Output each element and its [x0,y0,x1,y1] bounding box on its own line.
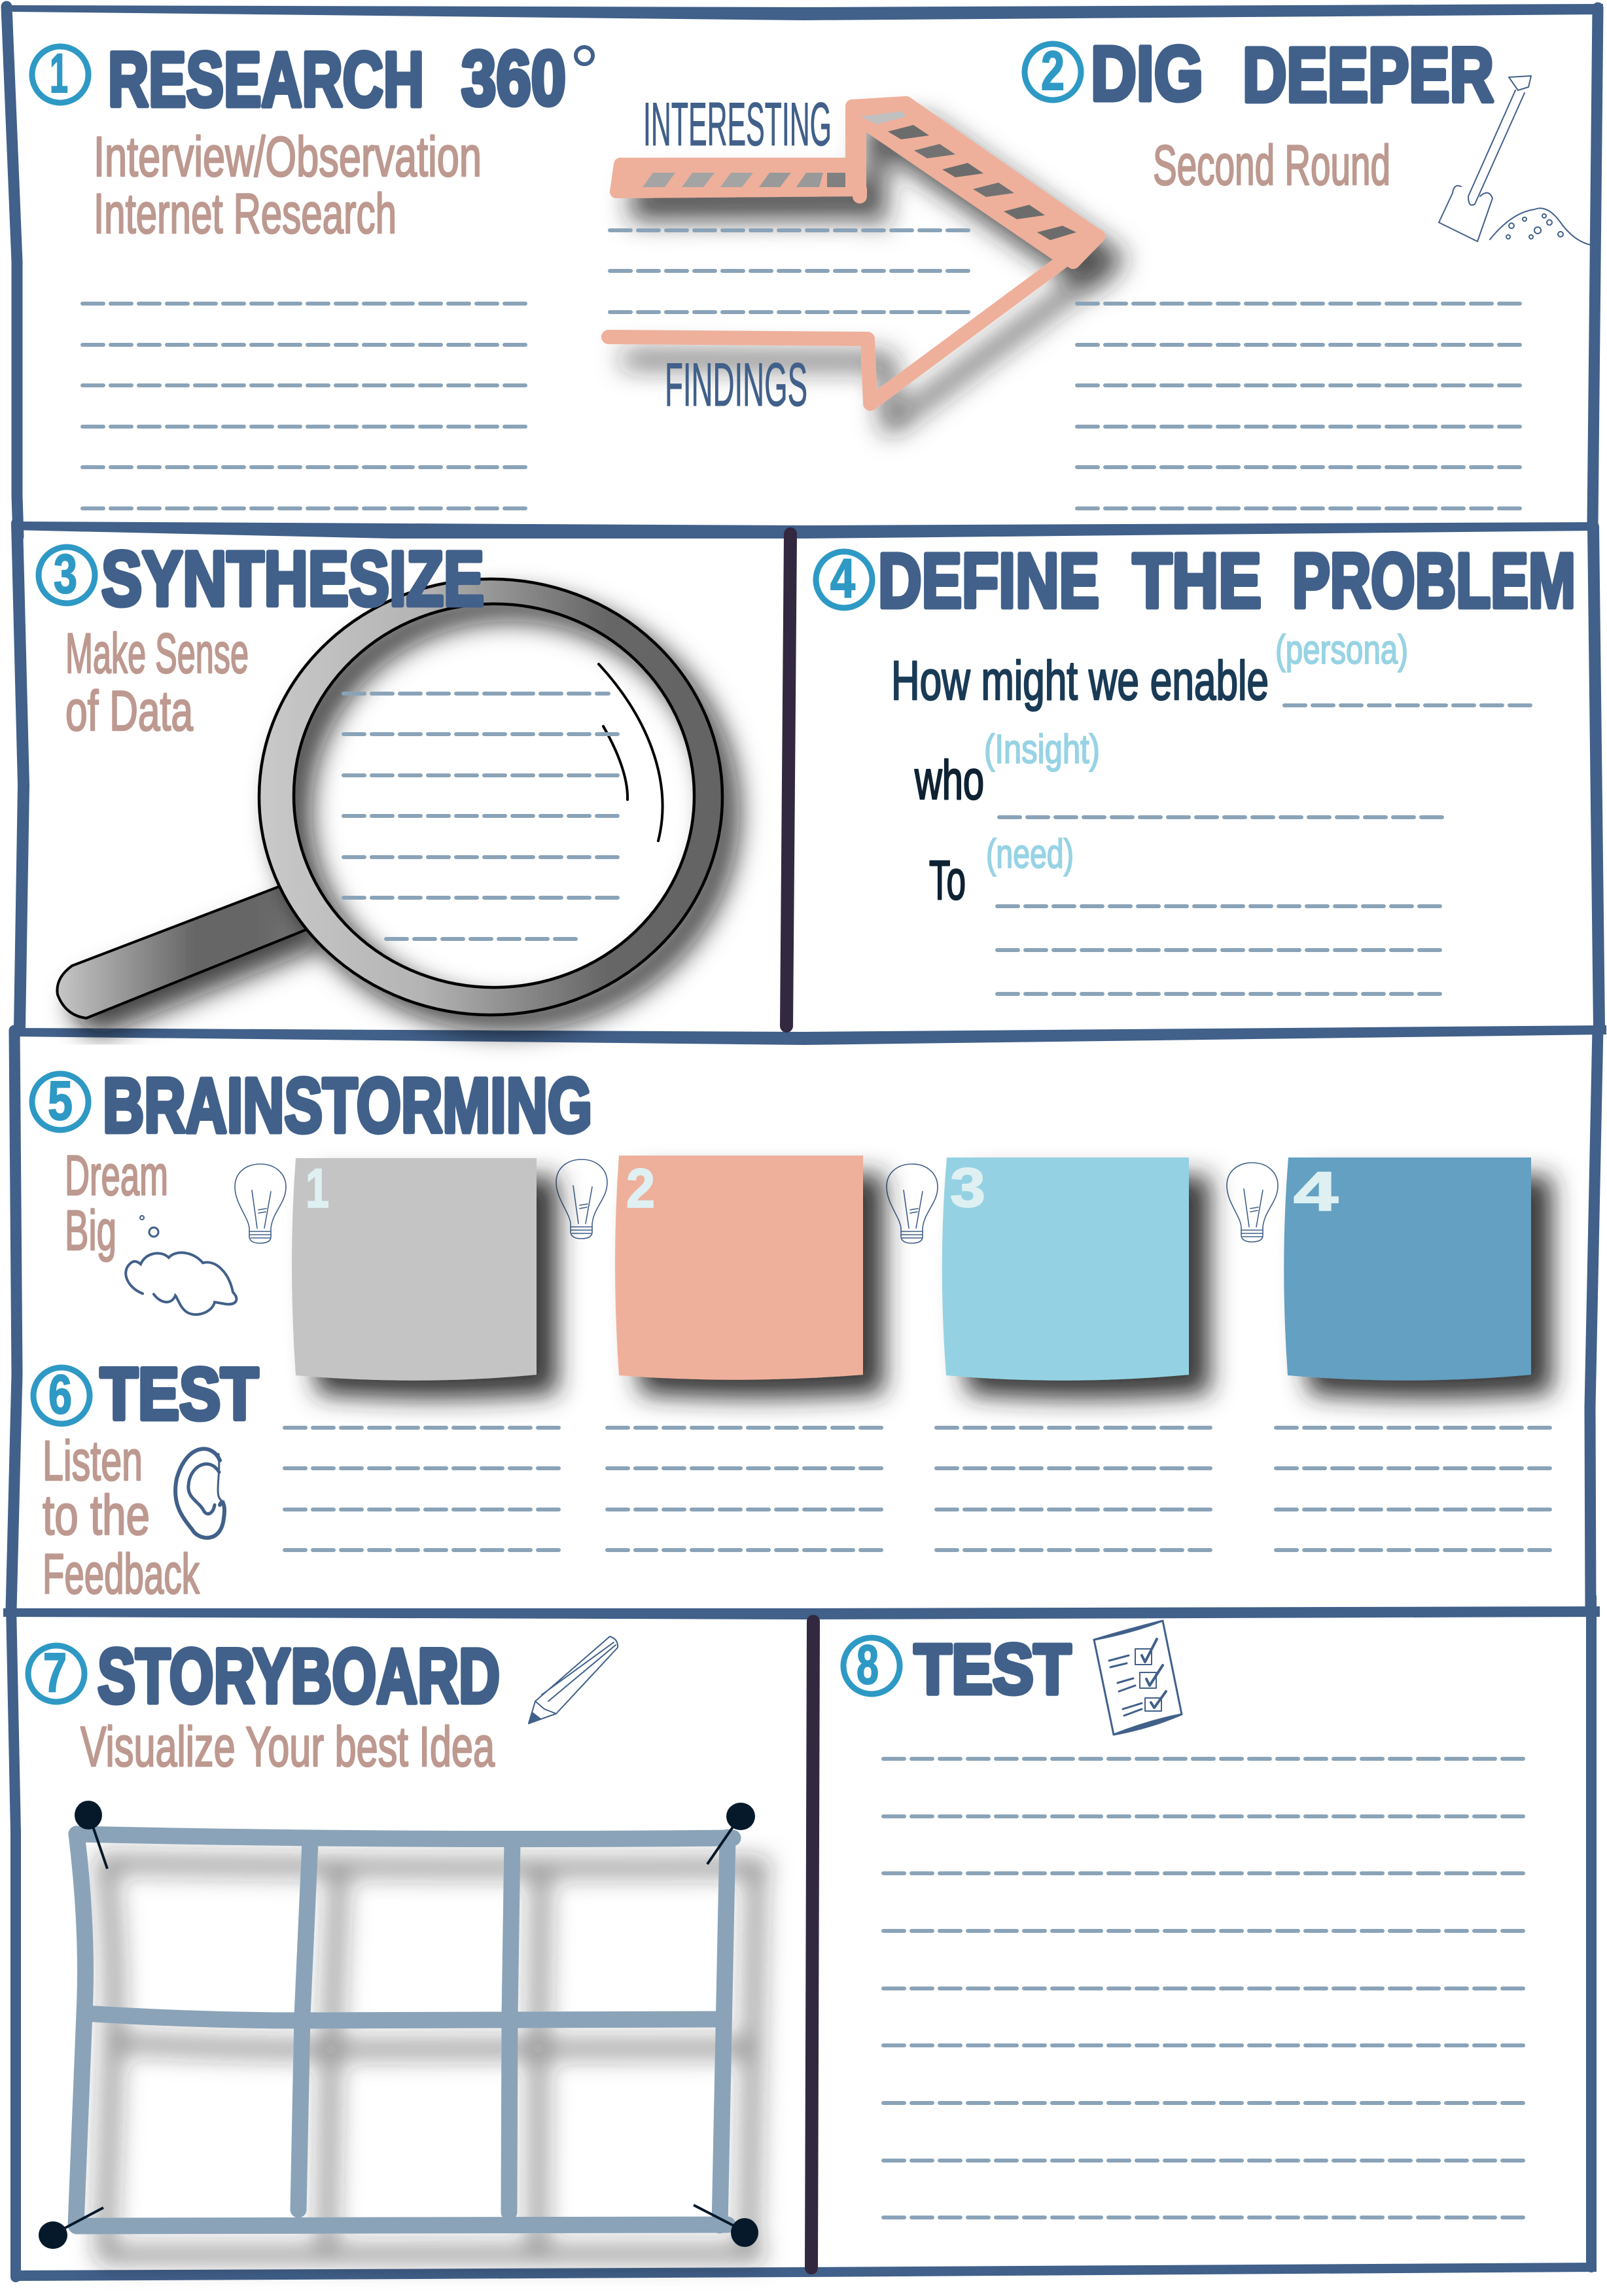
arrow outline [609,103,1098,404]
subheading: interview and internet research: Internet Research [94,183,397,245]
step badge 8: 8 [856,1634,879,1695]
writing lines [82,304,527,508]
icon: magnifying glass [57,579,722,1018]
heading: define the problem [878,538,1576,624]
subheading: make sense of data [65,622,249,743]
magnifier handle [57,886,308,1018]
writing lines: column 1 [285,1428,561,1550]
heading: test: TEST [100,1353,258,1435]
divider: row 2 [786,534,790,1026]
writing lines: column 2 [607,1428,885,1550]
panel: final test [843,1621,1527,2217]
writing lines [1077,304,1523,508]
heading: dig deeper [1091,31,1494,118]
panel: synthesize [39,536,722,1018]
prompt: to: (need) [986,832,1074,877]
step badge 3: 3 [54,543,77,605]
prompt: to: To [929,849,966,911]
panel: research 360 [32,35,593,508]
prompt: to [929,832,1074,911]
step badge 5 [32,1070,88,1131]
pin: bottom right [694,2205,758,2247]
heading: define the problem: DEFINE [878,538,1099,624]
storyboard grid [76,1834,733,2226]
heading: test: TEST [914,1629,1071,1708]
pin: top left [75,1801,107,1869]
magnifier ring [259,579,722,1015]
subheading: listen to the feedback: to the [43,1484,150,1547]
sticky note 3: 3 [950,1157,985,1218]
writing lines: column 4 [1276,1428,1554,1550]
icon: thought cloud [126,1216,236,1315]
writing lines [344,694,620,939]
step badge 7: 7 [43,1642,67,1703]
panel: dig deeper [1025,31,1590,508]
prompt: who: (Insight) [984,727,1100,772]
arrow writing lines [610,230,972,312]
arrow: interesting findings [609,90,1098,419]
subheading: visualize your best idea: Visualize Your best Idea [80,1716,495,1778]
step badge 4: 4 [830,548,855,609]
step badge 2 [1025,40,1081,101]
subheading: listen to the feedback [43,1430,200,1606]
heading: define the problem: THE [1133,538,1262,624]
arrow hatching [643,111,1076,240]
sticky note 4 [1284,1157,1531,1381]
need lines [997,906,1443,994]
sticky note 4: 4 [1294,1161,1338,1222]
icon: checklist [1094,1621,1182,1735]
subheading: dream big: Dream [65,1144,168,1207]
heading: storyboard: STORYBOARD [97,1633,500,1720]
subheading: make sense of data: of Data [65,680,193,743]
subheading: interview and internet research [94,126,482,245]
sticky note 2: 2 [626,1157,655,1219]
subheading: interview and internet research: Interview/Observation [94,126,482,188]
icon: light bulb 4 [1227,1163,1278,1242]
heading: research 360: RESEARCH [108,37,424,123]
heading: dig deeper: DEEPER [1243,32,1494,118]
subheading: listen to the feedback: Listen [43,1430,143,1492]
icon: ear [175,1449,224,1538]
arrow: interesting findings: INTERESTING [643,90,832,158]
step badge 3 [39,543,95,605]
arrow: interesting findings: FINDINGS [665,350,807,419]
step badge 4 [816,548,872,609]
sticky note 1: 1 [306,1157,329,1219]
heading: synthesize: SYNTHESIZE [101,536,484,622]
icon: light bulb 3 [887,1164,938,1243]
panel: define the problem [816,538,1576,994]
step badge 7 [28,1642,84,1703]
step badge 5: 5 [48,1070,73,1131]
persona line [1284,703,1532,707]
icon: light bulb 1 [235,1164,286,1243]
pin: bottom left [39,2208,103,2249]
icon: pencil [529,1636,618,1723]
sticky note 3 [942,1157,1189,1381]
panel: storyboard [28,1633,758,2249]
insight line [999,815,1445,819]
panel: brainstorming [32,1063,1531,1381]
subheading: dream big: Big [65,1199,116,1262]
subheading: second round: Second Round [1153,134,1390,197]
heading: brainstorming: BRAINSTORMING [103,1063,592,1149]
prompt: who [914,727,1100,811]
writing lines [883,1759,1527,2217]
step badge 6: 6 [48,1364,72,1425]
subheading: dream big [65,1144,168,1262]
prompt: how might we enable: (persona) [1275,627,1408,673]
subheading: make sense of data: Make Sense [65,622,249,685]
writing lines: column 3 [936,1428,1214,1550]
heading: dig deeper: DIG [1091,31,1203,117]
subheading: listen to the feedback: Feedback [43,1543,200,1606]
pin: top right [707,1803,755,1864]
step badge 1 [32,43,88,104]
sticky note 1 [292,1157,537,1381]
divider: row 4 [811,1621,813,2268]
step badge 2: 2 [1041,40,1065,101]
prompt: who: who [914,749,984,811]
prompt: how might we enable: How might we enable [891,650,1269,711]
sticky note 2 [615,1156,863,1380]
icon: light bulb 2 [556,1159,607,1239]
step badge 1: 1 [50,43,68,104]
step badge 6 [33,1364,90,1425]
icon: shovel and dirt pile [1439,76,1590,245]
lens highlights [599,664,663,841]
heading: research 360: 360 [461,35,566,122]
panel: test feedback [33,1353,1554,1606]
step badge 8 [843,1634,900,1695]
